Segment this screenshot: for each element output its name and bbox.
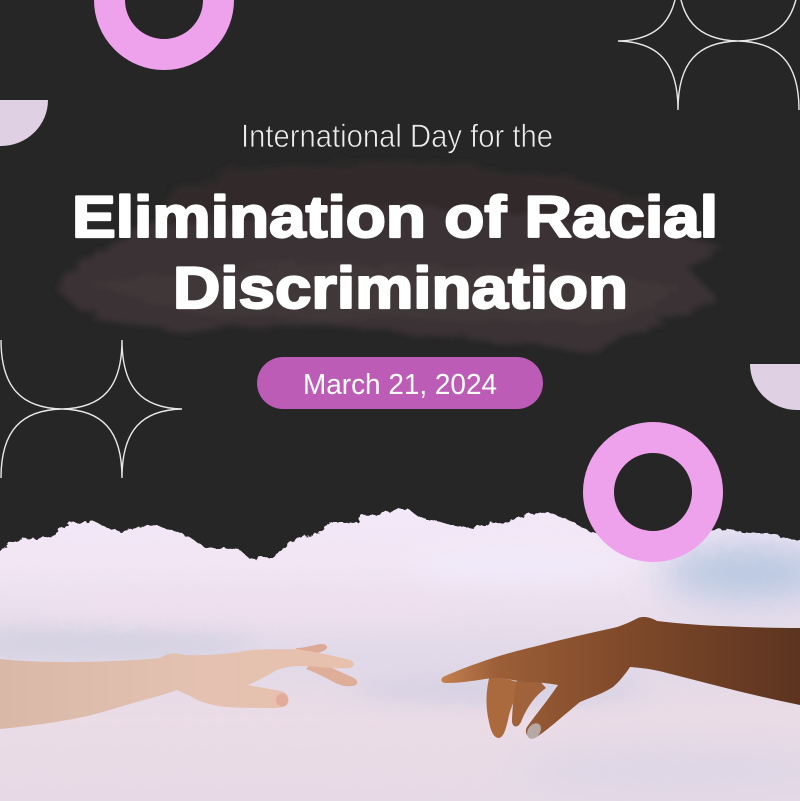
half circle: left [0,100,48,146]
cloud: blue right [660,546,800,598]
half circle: right [750,364,800,410]
arm, palm and index finger [441,617,800,738]
right arm and hand [441,617,800,741]
cloud: pink glow [40,596,480,620]
date pill: March 21, 2024 [303,369,497,401]
subtitle: International Day for the [241,118,553,154]
sparkle stars: top right [618,0,799,110]
title [72,185,718,321]
cloud: haze centre [350,678,650,702]
thumbnail [276,694,288,706]
painted thumbnail [524,721,544,741]
sky photo strip with torn edge [0,500,800,801]
cloud: lilac haze left [0,630,260,654]
lower finger [306,662,357,686]
left arm and hand [0,644,357,729]
cloud: pale lavender [410,549,630,581]
title: Elimination of Racial [72,185,718,250]
cloud: lower right lilac [578,752,784,782]
ring finger [512,670,546,726]
back finger [296,644,327,655]
arm, palm and thumb [0,649,354,729]
date pill [257,357,543,409]
brush stroke behind title [58,160,722,350]
middle finger [486,674,524,738]
ring: top [110,0,218,54]
ring: right [598,438,708,546]
sparkle stars: bottom left [1,340,182,478]
title: Discrimination [173,256,628,321]
